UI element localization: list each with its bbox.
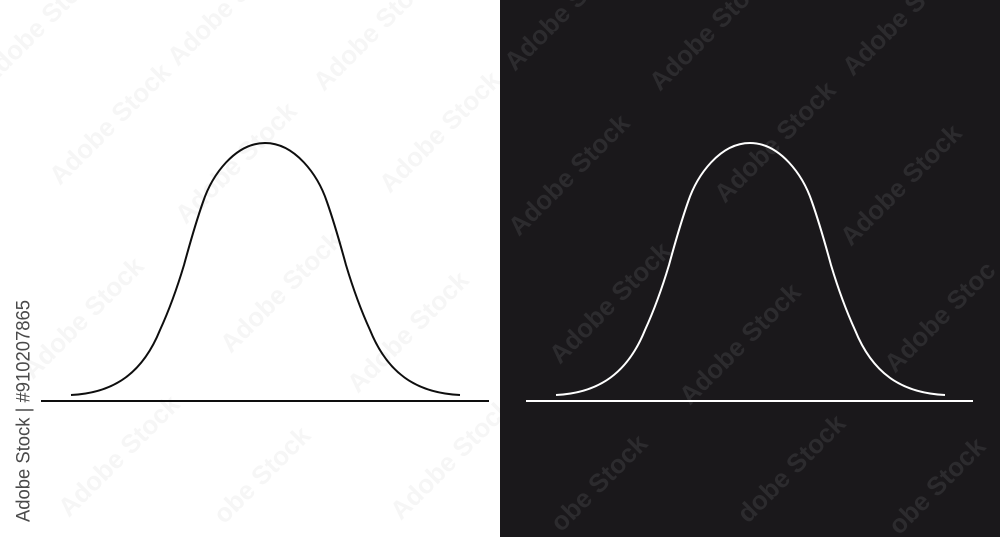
- watermarks on dark panel: obe Stock: [882, 431, 992, 537]
- watermarks on dark panel: [498, 0, 1000, 537]
- watermarks on white panel: Adobe Stock: [373, 64, 507, 198]
- watermarks on dark panel: Adobe Stock: [502, 107, 636, 241]
- panel: white background: [0, 0, 500, 537]
- watermarks on white panel: Adobe Stock: [214, 224, 348, 358]
- watermarks on white panel: Adobe Stock: [52, 388, 186, 522]
- watermarks on white panel: Adobe Stock: [43, 56, 177, 190]
- watermarks on dark panel: obe Stock: [544, 428, 654, 537]
- axis: white baseline: [526, 400, 973, 402]
- watermarks on white panel: obe Stock: [207, 420, 317, 529]
- watermarks on white panel: Adobe Stock: [16, 250, 150, 384]
- watermarks on dark panel: Adobe Stoc: [878, 255, 1000, 378]
- watermarks on white panel: Adobe Stock: [169, 95, 303, 229]
- watermarks on white panel: Adobe Stock: [384, 391, 518, 525]
- watermarks on dark panel: Adobe Stock: [543, 235, 677, 369]
- watermarks on dark panel: Adobe Stock: [834, 117, 968, 251]
- watermarks on dark panel: dobe Stock: [731, 408, 852, 528]
- watermarks on dark panel: Adobe Stock: [673, 276, 807, 410]
- stock id label: Adobe Stock | #910207865: [14, 300, 34, 522]
- watermarks on white panel: Adobe Stock: [341, 264, 475, 398]
- chart: white bell curve: [556, 143, 945, 395]
- watermarks on dark panel: Adobe Stock: [708, 74, 842, 208]
- axis: black baseline: [41, 400, 489, 402]
- chart: black bell curve: [71, 143, 460, 395]
- watermarks on white panel: [0, 0, 518, 529]
- panel: dark background: [500, 0, 1000, 537]
